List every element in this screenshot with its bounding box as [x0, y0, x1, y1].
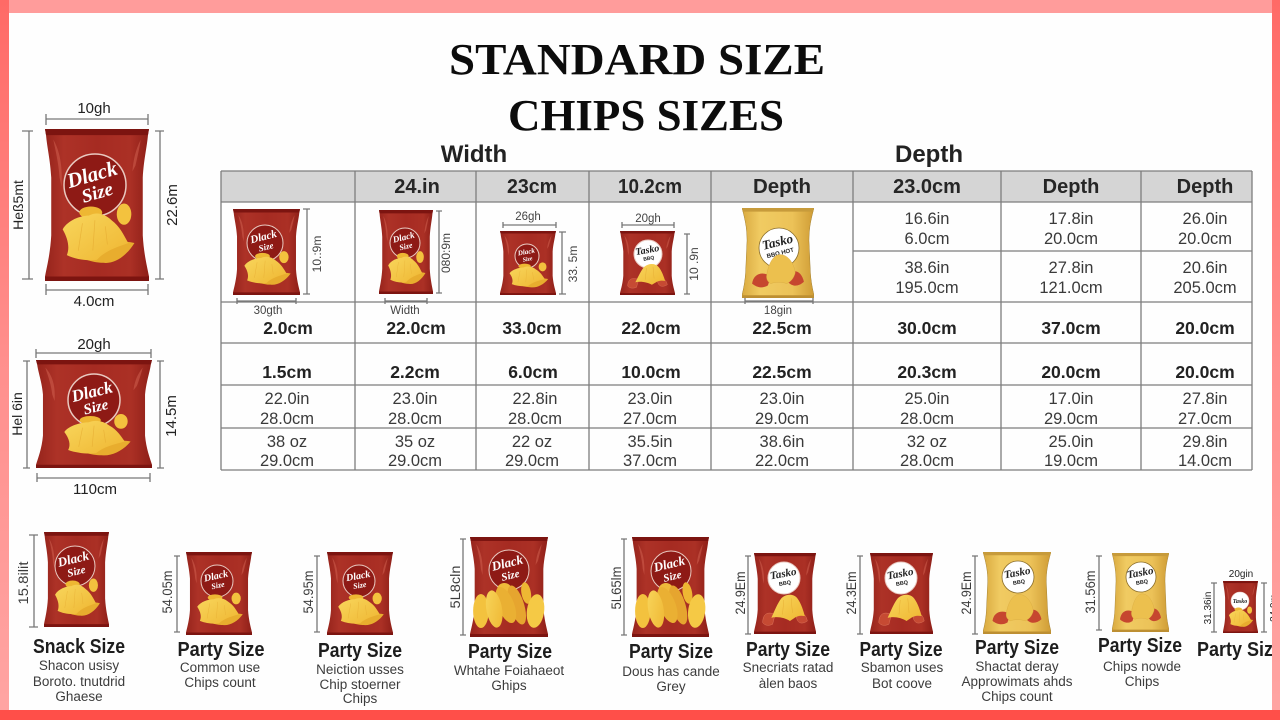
table row: width values bold: 22.0cm — [621, 318, 681, 338]
table row: inch and cm values: 28.0cm — [260, 410, 314, 428]
item: party size 7: Bot coove — [872, 676, 932, 691]
item: party size 8 yellow: Approwimats ahds — [961, 674, 1073, 689]
item: party size 8 yellow: 24.9Em — [959, 572, 974, 614]
table row: ounce and cm values: 35.5in — [628, 433, 672, 451]
tall snack bag with dimensions: 4.0cm — [74, 293, 114, 310]
table header row: 10.2cm — [618, 176, 682, 198]
table bag 3: 26gh — [515, 211, 541, 223]
item: snack size 1: Dlack — [55, 547, 91, 570]
table row: width values bold: 37.0cm — [1041, 318, 1101, 338]
title — [449, 35, 825, 140]
table bag 1: Dlack — [248, 228, 279, 246]
panel: left reference bags — [9, 100, 181, 498]
panel: size table — [221, 171, 1252, 470]
table upper right values: 6.0cm — [905, 230, 949, 248]
item: party size 3: 54.95m — [301, 570, 316, 614]
item: party size 9 yellow: 31.56m — [1083, 570, 1098, 614]
table header row: Depth — [1043, 176, 1099, 198]
table row: inch and cm values: 22.0in — [265, 390, 309, 408]
square snack bag with dimensions: 110cm — [73, 481, 117, 498]
table upper right values: 20.0cm — [1178, 230, 1232, 248]
table row: inch and cm values: 23.0in — [760, 390, 804, 408]
table bag 1: 10.:9m — [310, 236, 324, 272]
item: party size 6: 24.9Em — [733, 572, 748, 614]
item: party size 8 yellow: BBQ — [1012, 579, 1026, 587]
item: party size 4 large — [448, 537, 564, 693]
table header row: Depth — [753, 176, 811, 198]
table bag 4: 10 .9n — [687, 247, 701, 281]
square snack bag with dimensions — [9, 336, 180, 498]
square snack bag with dimensions: Size — [82, 397, 110, 419]
item: party size 6: Tasko — [769, 566, 798, 582]
table row: inch and cm values: 27.8in — [1183, 390, 1227, 408]
item: party size 2 — [160, 552, 264, 690]
tall snack bag with dimensions: Dlack — [63, 156, 120, 193]
title: STANDARD SIZE — [449, 35, 825, 84]
table row: width values bold: 22.5cm — [752, 318, 812, 338]
item: party size 3: Dlack — [344, 569, 371, 584]
item: party size 9 yellow — [1083, 553, 1182, 689]
item: party size 5 large: Grey — [656, 679, 686, 694]
table row: depth values bold: 2.2cm — [390, 362, 440, 382]
item: party size 2: Size — [210, 580, 226, 591]
item: party size 5 large: Dlack — [651, 552, 687, 575]
table row: width values bold: 33.0cm — [502, 318, 562, 338]
table bag 4: 20gh — [635, 213, 661, 225]
square snack bag with dimensions: 14.5m — [163, 395, 180, 437]
table row: depth values bold: 1.5cm — [262, 362, 312, 382]
table row: inch and cm values: 23.0in — [393, 390, 437, 408]
item: party size 4 large: Ghips — [491, 678, 527, 693]
table header row: 23.0cm — [893, 176, 961, 198]
table row: inch and cm values: 28.0cm — [900, 410, 954, 428]
table row: inch and cm values: 29.0cm — [755, 410, 809, 428]
table upper right values — [895, 210, 1237, 297]
item: party size 10 small: 24.9m — [1269, 594, 1280, 622]
table row: ounce and cm values: 28.0cm — [900, 452, 954, 470]
table bag 5 yellow: Tasko — [760, 231, 795, 253]
item: party size 5 large — [609, 537, 720, 694]
table row: inch and cm values: 28.0cm — [388, 410, 442, 428]
square snack bag with dimensions: Hel 6in — [9, 392, 25, 436]
table row: depth values bold: 20.0cm — [1041, 362, 1101, 382]
item: party size 3: Party Size — [318, 640, 402, 662]
table header row: Depth — [1177, 176, 1233, 198]
item: party size 10 small — [1197, 569, 1280, 661]
table row: ounce and cm values: 32 oz — [907, 433, 947, 451]
item: snack size 1: Snack Size — [33, 636, 125, 658]
table row: width values bold: 2.0cm — [263, 318, 313, 338]
table row: ounce and cm values: 38.6in — [760, 433, 804, 451]
table row: inch and cm values: 27.0cm — [1178, 410, 1232, 428]
table upper right values: 38.6in — [905, 259, 949, 277]
item: party size 10 small: Tasko — [1233, 599, 1247, 605]
table row: inch and cm values: 29.0cm — [1044, 410, 1098, 428]
table bag 5 yellow: BBQ HOT — [766, 247, 795, 260]
item: party size 2: Common use — [180, 660, 260, 675]
table header row: 23cm — [507, 176, 557, 198]
table row: inch and cm values — [260, 390, 1232, 428]
tall snack bag with dimensions: 22.6m — [164, 184, 181, 226]
item: party size 8 yellow: Party Size — [975, 637, 1059, 659]
item: snack size 1: Ghaese — [55, 689, 103, 704]
item: party size 9 yellow: Chips nowde — [1103, 659, 1181, 674]
table row: ounce and cm values: 38 oz — [267, 433, 307, 451]
item: party size 9 yellow: Chips — [1125, 674, 1160, 689]
item: party size 4 large: Party Size — [468, 641, 552, 663]
table row: depth values bold: 20.3cm — [897, 362, 957, 382]
item: snack size 1: 15.8ilit — [16, 561, 31, 604]
item: party size 4 large: 5L8cln — [448, 566, 463, 608]
item: party size 3: Chip stoerner — [319, 677, 401, 692]
item: party size 8 yellow: Chips count — [981, 689, 1053, 704]
item: party size 2: Chips count — [184, 675, 256, 690]
item: snack size 1: Size — [66, 564, 87, 580]
table row: depth values bold: 10.0cm — [621, 362, 681, 382]
item: party size 5 large: Party Size — [629, 641, 713, 663]
table row: depth values bold: 22.5cm — [752, 362, 812, 382]
table upper right values: 20.6in — [1183, 259, 1227, 277]
square snack bag with dimensions: 20gh — [77, 336, 111, 353]
table row: ounce and cm values: 29.0cm — [388, 452, 442, 470]
tall snack bag with dimensions — [10, 100, 181, 310]
item: party size 6: Party Size — [746, 639, 830, 661]
item: party size 2: Dlack — [202, 569, 229, 585]
item: party size 9 yellow: Tasko — [1126, 565, 1155, 581]
item: party size 6: Snecriats ratad — [743, 660, 833, 675]
table bag 1: Size — [257, 240, 274, 254]
item: party size 2: 54.05m — [160, 570, 175, 614]
table bag 2: Dlack — [391, 230, 416, 245]
table upper right values: 20.0cm — [1044, 230, 1098, 248]
table row: width values bold: 22.0cm — [386, 318, 446, 338]
tall snack bag with dimensions: Heß5mt — [10, 180, 26, 230]
item: party size 3: Chips — [343, 691, 378, 706]
table row: ounce and cm values: 19.0cm — [1044, 452, 1098, 470]
item: snack size 1 — [16, 532, 125, 704]
item: party size 4 large: Whtahe Foiahaeot — [454, 663, 564, 678]
square snack bag with dimensions: Dlack — [69, 377, 115, 406]
item: party size 4 large: Dlack — [489, 551, 525, 574]
table bag 3: 33. 5m — [566, 246, 580, 282]
item: party size 7: Tasko — [886, 566, 915, 582]
table bag 5 yellow — [742, 208, 814, 317]
item: party size 6 — [733, 553, 833, 691]
item: party size 10 small: 31.36in — [1203, 592, 1214, 624]
item: party size 5 large: 5L65lm — [609, 566, 624, 610]
table upper right values: 26.0in — [1183, 210, 1227, 228]
item: party size 2: Party Size — [178, 639, 264, 661]
table row: ounce and cm values — [260, 433, 1232, 470]
table bag 2 — [379, 210, 453, 317]
item: party size 7: BBQ — [895, 580, 909, 588]
table row: width values bold: 30.0cm — [897, 318, 957, 338]
table grid — [221, 171, 1252, 470]
table row: depth values bold: 6.0cm — [508, 362, 558, 382]
table row: ounce and cm values: 29.0cm — [260, 452, 314, 470]
table row: ounce and cm values: 37.0cm — [623, 452, 677, 470]
item: party size 9 yellow: Party Size — [1098, 635, 1182, 657]
item: party size 10 small: 20gin — [1229, 569, 1253, 580]
item: party size 3: Neiction usses — [316, 662, 404, 677]
table row: inch and cm values: 28.0cm — [508, 410, 562, 428]
table row: ounce and cm values: 35 oz — [395, 433, 435, 451]
table upper right values: 205.0cm — [1173, 279, 1237, 297]
title: CHIPS SIZES — [508, 91, 784, 140]
item: party size 7: Sbamon uses — [861, 660, 944, 675]
table row: ounce and cm values: 29.0cm — [505, 452, 559, 470]
item: party size 8 yellow — [959, 552, 1073, 704]
table bag 3 — [500, 211, 580, 295]
table upper right values: 16.6in — [905, 210, 949, 228]
table row: depth values bold: 20.0cm — [1175, 362, 1235, 382]
table upper right values: 195.0cm — [895, 279, 959, 297]
item: party size 4 large: Size — [500, 568, 521, 584]
item: party size 8 yellow: Tasko — [1003, 565, 1032, 581]
table bag 4: Tasko — [635, 243, 660, 258]
item: party size 7 — [844, 553, 944, 691]
table bag 3: Size — [522, 256, 533, 264]
item: party size 7: Party Size — [860, 639, 942, 661]
item: party size 5 large: Dous has cande — [622, 664, 720, 679]
table row: width values bold — [263, 318, 1235, 338]
item: party size 5 large: Size — [662, 569, 683, 585]
item: party size 3 — [301, 552, 404, 706]
item: party size 6: BBQ — [778, 580, 792, 588]
column group heading: width: Width — [441, 141, 507, 168]
table bag 4 — [620, 213, 701, 295]
table bag 2: Width — [390, 305, 420, 317]
tall snack bag with dimensions: 10gh — [77, 100, 111, 117]
item: party size 3: Size — [352, 580, 368, 591]
item: snack size 1: Shacon usisy — [39, 658, 119, 673]
table row: ounce and cm values: 14.0cm — [1178, 452, 1232, 470]
table row: inch and cm values: 25.0in — [905, 390, 949, 408]
table upper right values: 121.0cm — [1039, 279, 1103, 297]
table row: inch and cm values: 22.8in — [513, 390, 557, 408]
table row: width values bold: 20.0cm — [1175, 318, 1235, 338]
table bag 4: BBQ — [643, 255, 655, 263]
table row: ounce and cm values: 29.8in — [1183, 433, 1227, 451]
item: party size 7: 24.3Em — [844, 572, 859, 614]
table row: depth values bold — [262, 362, 1235, 382]
table upper right values: 27.8in — [1049, 259, 1093, 277]
item: party size 6: àlen baos — [759, 676, 818, 691]
tall snack bag with dimensions: Size — [79, 179, 116, 208]
column group heading: depth: Depth — [895, 141, 963, 168]
table header row — [221, 171, 1252, 202]
table row: inch and cm values: 27.0cm — [623, 410, 677, 428]
panel: bottom size lineup — [16, 532, 1280, 706]
table bag 3: Dlack — [516, 247, 536, 258]
table bag 5 yellow: 18gin — [764, 305, 792, 317]
table row: inch and cm values: 17.0in — [1049, 390, 1093, 408]
table row: ounce and cm values: 22 oz — [512, 433, 552, 451]
table row: inch and cm values: 23.0in — [628, 390, 672, 408]
table bag 2: Size — [398, 240, 414, 252]
table bag 1 — [233, 209, 324, 317]
table bag 1: 30gth — [254, 305, 282, 317]
item: snack size 1: Boroto. tnutdrid — [33, 674, 125, 689]
table row: ounce and cm values: 25.0in — [1049, 433, 1093, 451]
item: party size 8 yellow: Shactat deray — [975, 659, 1059, 674]
table row: ounce and cm values: 22.0cm — [755, 452, 809, 470]
table header row: 24.in — [394, 176, 440, 198]
table bag 2: 080:9m — [439, 233, 453, 273]
item: party size 9 yellow: BBQ — [1135, 579, 1149, 587]
table upper right values: 17.8in — [1049, 210, 1093, 228]
